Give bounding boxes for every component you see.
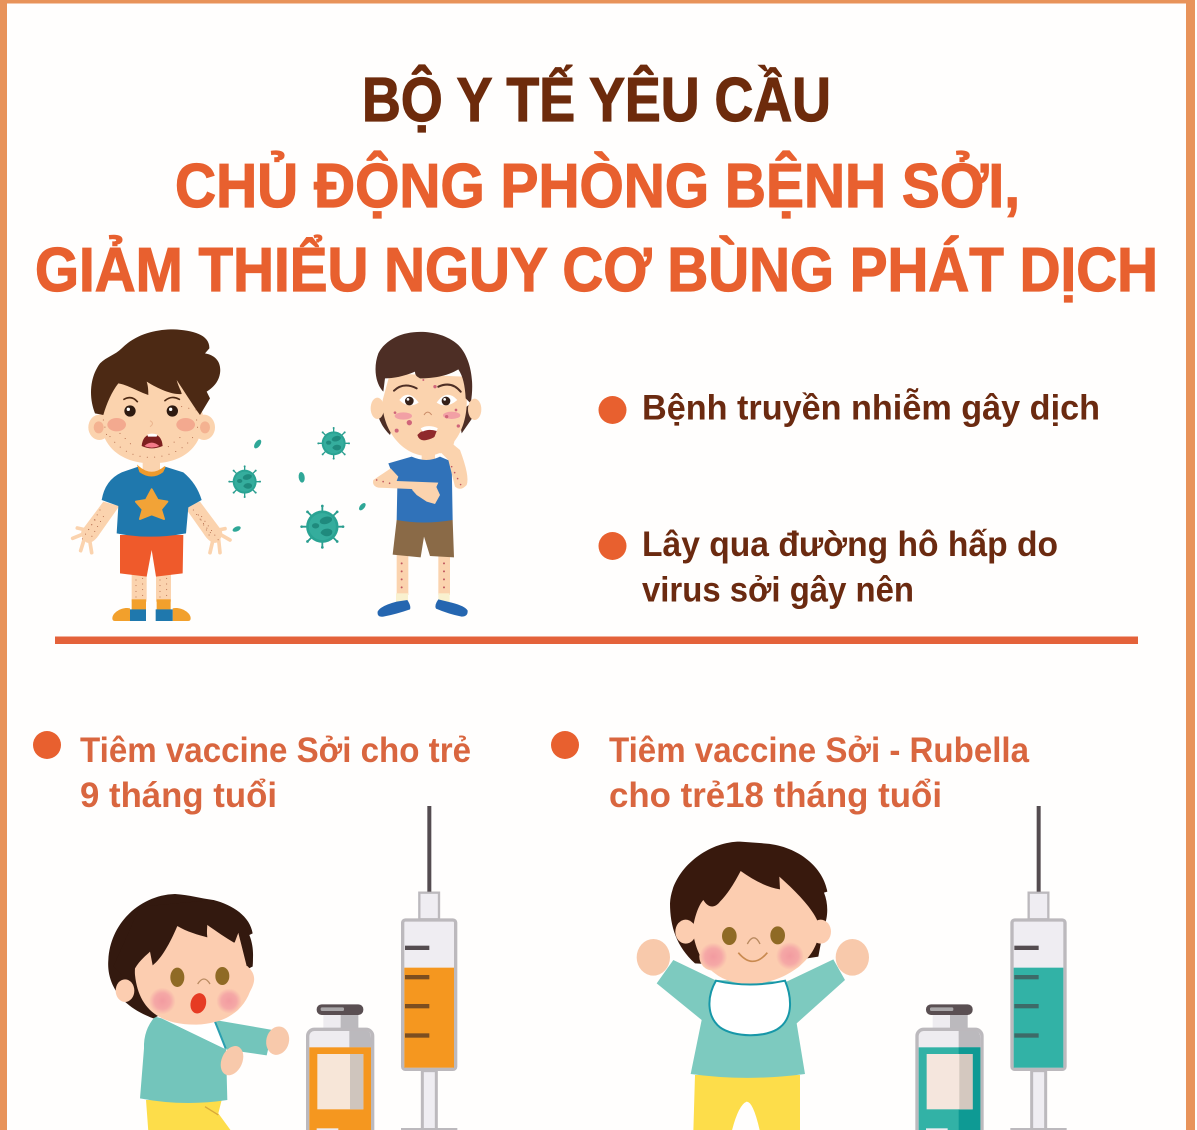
bullet: respiratory transmission: Lây qua đường hô hấp do (642, 525, 1058, 564)
virus particles (228, 427, 367, 549)
child with star shirt (73, 329, 230, 621)
orange vaccine vial (308, 1004, 373, 1130)
baby raising arms (637, 842, 869, 1130)
teal vaccine syringe (1010, 806, 1067, 1130)
bullet: respiratory transmission: virus sởi gây nên (642, 570, 914, 610)
section divider (55, 636, 1138, 644)
teal vaccine vial (917, 1004, 982, 1130)
child covering mouth (371, 332, 481, 617)
vaccine heading: 9 months: Tiêm vaccine Sởi cho trẻ (80, 731, 471, 770)
vaccine heading: 9 months (33, 731, 471, 815)
illustration: two children with measles and viruses (73, 329, 481, 621)
title (35, 66, 1158, 305)
illustration: 9-month baby with orange vaccine (108, 806, 457, 1130)
vaccine heading: 18 months: cho trẻ18 tháng tuổi (609, 776, 942, 815)
vaccine heading: 9 months: 9 tháng tuổi (80, 776, 277, 815)
title line: prevention: CHỦ ĐỘNG PHÒNG BỆNH SỞI, (175, 152, 1020, 221)
orange vaccine syringe (401, 806, 457, 1130)
vaccine heading: 18 months: Tiêm vaccine Sởi - Rubella (609, 731, 1030, 770)
illustration: 18-month baby with teal vaccine (637, 806, 1067, 1130)
vaccine heading: 18 months (551, 731, 1030, 815)
bullet: respiratory transmission (598, 525, 1058, 610)
bullet: infectious disease: Bệnh truyền nhiễm gây dịch (642, 388, 1100, 428)
title line: ministry: BỘ Y TẾ YÊU CẦU (362, 66, 831, 135)
baby crawling (108, 894, 292, 1130)
